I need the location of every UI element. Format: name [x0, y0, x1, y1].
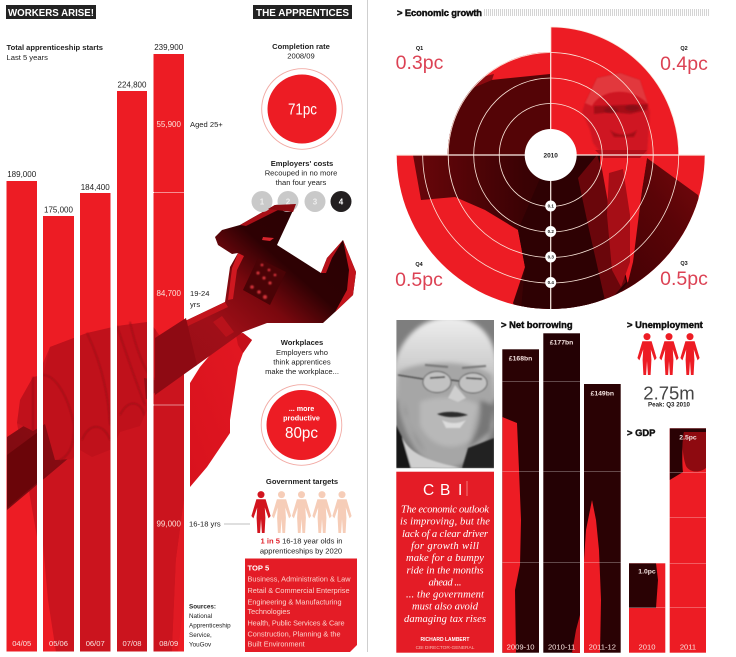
panel: workplaces: 80pc [285, 425, 318, 442]
ring labels: 0.3 [548, 255, 554, 260]
panel: employers' costs: 4 [339, 198, 344, 206]
photo: hand gripping wrench [7, 204, 356, 652]
label: Q4: Q4 [415, 262, 424, 268]
bar values [7, 43, 184, 214]
quote [400, 504, 490, 625]
wrench handle detail [7, 432, 38, 508]
quote: is improving, but the [400, 517, 490, 528]
panel: completion rate: 71pc [288, 102, 317, 118]
years: 2011 [680, 642, 696, 652]
bar 2010 [629, 563, 665, 653]
sources: Service, [189, 632, 212, 639]
panel: top 5 [245, 558, 357, 652]
panel: completion rate: 2008/09 [287, 52, 315, 60]
panel: government targets: 1 in 5 16-18 year olds in [261, 536, 342, 546]
segment values: 99,000 [156, 520, 181, 528]
quote: The economic outlook [401, 504, 489, 516]
years [507, 642, 616, 652]
bar 04/05 [6, 181, 37, 652]
quote: lack of a clear driver [402, 529, 489, 540]
quote: ... the government [406, 590, 485, 601]
bar values: 184,400 [81, 183, 110, 192]
quote: for growth will [411, 541, 479, 552]
panel: government targets [251, 477, 352, 556]
panel: workplaces: think apprentices [273, 358, 331, 366]
bar values: 239,900 [154, 43, 184, 52]
ring labels: 0.4 [548, 280, 554, 285]
panel: government targets: apprenticeships by 2020 [260, 546, 342, 556]
panel: workplaces: make the workplace... [265, 367, 339, 376]
axes [397, 154, 705, 156]
panel: employers' costs: 2 [286, 198, 291, 206]
panel: government targets: Government targets [266, 477, 338, 486]
panel: employers' costs: 3 [313, 198, 318, 206]
label: Q1: 0.3pc [396, 52, 444, 74]
segment labels: Aged 25+ [190, 120, 223, 129]
sources: YouGov [189, 642, 212, 648]
panel: workplaces: Employers who [276, 348, 328, 357]
sources: Apprenticeship [189, 622, 231, 630]
bar 2010-11 [543, 333, 580, 653]
years: 2009-10 [507, 642, 535, 652]
chart subtitle: Last 5 years [6, 53, 48, 62]
sources: Sources: [189, 604, 216, 610]
wrench handle over bar 5 [155, 318, 197, 395]
icon: three people [637, 333, 700, 375]
year labels [12, 639, 178, 648]
bar chart: net borrowing [502, 333, 621, 653]
gridlines [629, 473, 706, 607]
quote: ahead ... [428, 577, 462, 588]
year labels: 08/09 [159, 639, 178, 648]
panel: employers' costs: Recouped in no more [265, 168, 337, 178]
label: Q2: 0.4pc [660, 53, 708, 75]
values: £177bn [550, 340, 573, 346]
center label 2010: 2010 [543, 152, 558, 160]
panel: employers' costs: than four years [276, 178, 327, 187]
quote: ride in the months [406, 565, 484, 576]
panel: employers' costs: 1 [260, 198, 265, 206]
glasses [423, 372, 451, 392]
ring labels [545, 200, 556, 288]
forearm [17, 322, 184, 652]
quote: make for a bumpy [406, 553, 484, 564]
bar chart: apprenticeship starts [6, 43, 356, 652]
values [509, 340, 614, 398]
photo: Richard Lambert portrait [396, 320, 494, 468]
panel: workplaces: ... more [289, 404, 314, 413]
bar chart: GDP: 2.5pc [679, 434, 697, 442]
panel: unemployment: Peak: Q3 2010 [648, 402, 691, 409]
panel: top 5: Construction, Planning & the [248, 630, 340, 639]
bar 2009-10 [502, 349, 539, 653]
bar 2011 [670, 428, 706, 653]
ring labels: 0.1 [548, 204, 554, 209]
head [582, 92, 650, 156]
rings [423, 27, 679, 283]
segment values [156, 120, 181, 528]
panel: workplaces: Workplaces [281, 338, 323, 347]
segment labels: yrs [190, 300, 200, 309]
nose and mouth [448, 385, 466, 402]
label: Q3: 0.5pc [660, 268, 708, 290]
fingers [17, 322, 158, 460]
quote: must also avoid [412, 602, 479, 613]
segment labels: 19-24 [190, 289, 209, 298]
upper left arm in Q1 [448, 74, 550, 154]
bar divider lines [154, 192, 184, 194]
bar 08/09 [154, 54, 184, 652]
panel: employers' costs: Employers' costs [271, 159, 333, 168]
panel: top 5: Engineering & Manufacturing [248, 598, 342, 607]
bar values: 224,800 [118, 80, 147, 90]
panel: top 5: TOP 5 [248, 564, 270, 572]
years [639, 642, 696, 652]
tie [607, 169, 630, 287]
center label 2010 [525, 129, 577, 181]
values: 1.0pc [638, 568, 656, 576]
sources [189, 604, 231, 648]
heading: GDP: > GDP [627, 427, 655, 438]
years: 2011-12 [589, 642, 616, 652]
shirt [600, 158, 647, 282]
photo: man with raised arm [413, 72, 698, 309]
attribution [416, 637, 475, 651]
label: Q1: Q1 [416, 46, 423, 52]
sectors [397, 27, 705, 309]
segment values: 55,900 [156, 120, 181, 129]
panel: top 5: Business, Administration & Law [248, 575, 351, 584]
chart subtitle: Total apprenticeship starts [6, 43, 103, 52]
jacket right [620, 158, 698, 292]
year labels: 07/08 [122, 639, 142, 648]
heading: economic growth: > Economic growth [397, 7, 482, 18]
panel: top 5: Built Environment [248, 639, 305, 648]
bar chart: GDP [629, 428, 706, 653]
arm in Q4 [413, 155, 600, 320]
segment labels [189, 120, 250, 528]
panel: employers' costs [252, 159, 352, 212]
year labels: 05/06 [49, 639, 68, 648]
panel: completion rate [262, 42, 342, 149]
segment values: 84,700 [156, 289, 181, 298]
years: 2010-11 [548, 642, 575, 652]
panel: top 5: Retail & Commercial Enterprise [248, 586, 350, 595]
bar 07/08 [117, 91, 147, 652]
panel: workplaces [261, 338, 342, 465]
panel: unemployment [627, 319, 703, 409]
ring labels: 0.2 [548, 229, 554, 234]
bar 06/07 [80, 193, 110, 652]
panel: top 5: Technologies [248, 607, 290, 616]
chart subtitle [6, 43, 103, 62]
bar 05/06 [43, 216, 74, 652]
attribution: CBI DIRECTOR-GENERAL [416, 645, 475, 651]
wrench [7, 204, 356, 510]
heading: economic growth [397, 7, 710, 18]
panel: unemployment: > Unemployment [627, 319, 703, 330]
values: £149bn [591, 390, 614, 398]
bar 2011-12 [584, 384, 621, 653]
years: 2010 [639, 642, 655, 652]
CBI logo: CBI [423, 482, 462, 499]
radial chart: quarterly growth [397, 27, 720, 320]
heading: net borrowing: > Net borrowing [501, 319, 573, 330]
sources: National [189, 613, 212, 620]
panel: completion rate: Completion rate [272, 42, 330, 51]
label: Q3: Q3 [680, 261, 688, 267]
bar values: 175,000 [44, 206, 74, 214]
icon: five people [251, 491, 352, 533]
panel: unemployment: 2.75m [643, 382, 695, 404]
jacket left [518, 179, 628, 309]
heading: workers arise: WORKERS ARISE! [8, 8, 94, 19]
bar values: 189,000 [7, 170, 37, 179]
gridlines [502, 382, 621, 562]
quote: damaging tax rises [404, 614, 486, 625]
attribution: RICHARD LAMBERT [421, 637, 469, 643]
heading: the apprentices: THE APPRENTICES [256, 8, 349, 19]
year labels: 04/05 [12, 639, 31, 648]
panel: CBI quote [396, 472, 494, 653]
wrench jaw over circles [268, 204, 296, 212]
label: Q4: 0.5pc [395, 269, 443, 291]
year labels: 06/07 [86, 639, 105, 648]
thumb [190, 333, 252, 487]
segment labels: 16-18 yrs [189, 520, 221, 528]
suit [396, 425, 411, 468]
panel: workplaces: productive [283, 414, 320, 422]
hair and face masses [396, 320, 494, 468]
panel: top 5: Health, Public Services & Care [248, 618, 344, 627]
values: £168bn [509, 356, 532, 362]
column divider [367, 0, 368, 652]
label: Q2: Q2 [680, 46, 688, 52]
